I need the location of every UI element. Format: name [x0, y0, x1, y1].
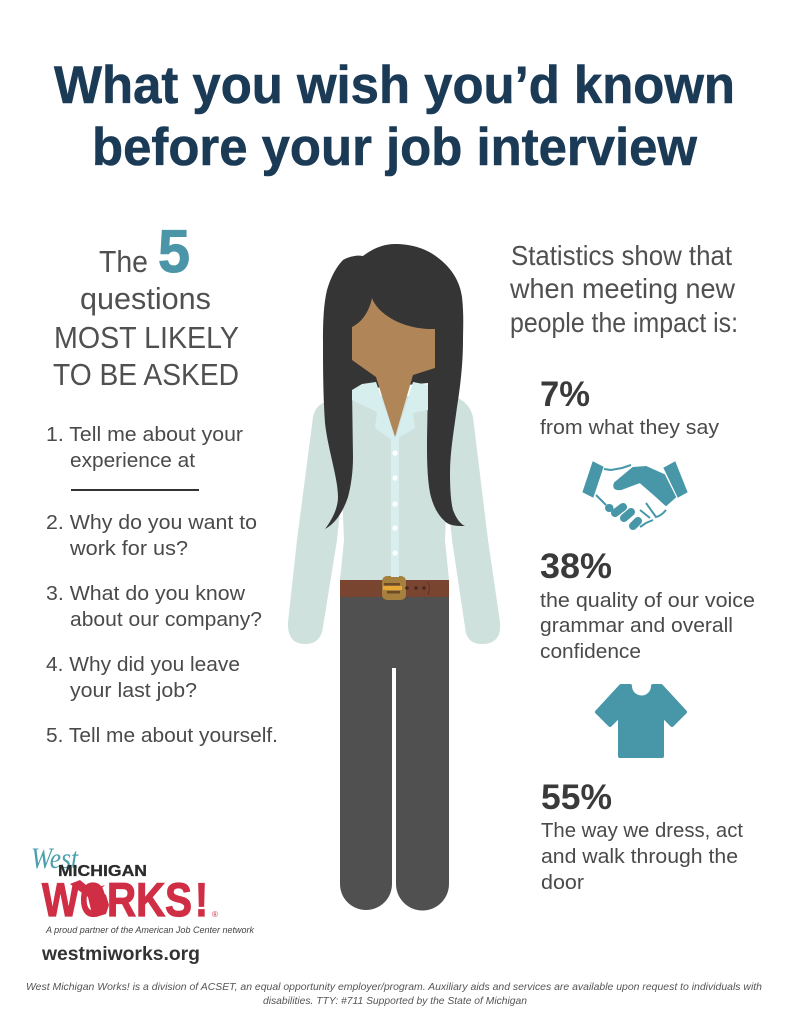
question list: 4. Why did you leave	[46, 654, 240, 676]
question list	[46, 424, 278, 747]
question list: work for us?	[69, 538, 188, 560]
stat: 7%	[540, 375, 719, 439]
logo: West Michigan Works: RKS	[107, 873, 192, 926]
belt	[340, 576, 449, 600]
logo: West Michigan Works	[31, 842, 218, 926]
logo tagline: A proud partner of the American Job Center network	[45, 925, 254, 935]
stat: 7%: 7%	[540, 375, 590, 414]
question list: 1. Tell me about your	[46, 424, 243, 446]
question list: about our company?	[70, 609, 262, 631]
shirt placket and buttons	[391, 437, 399, 577]
question list: 5. Tell me about yourself.	[46, 725, 278, 747]
stat: 38%: the quality of our voice	[540, 590, 755, 612]
question list: your last job?	[70, 680, 197, 702]
heading: the 5 questions: MOST LIKELY	[54, 320, 239, 355]
logo: West Michigan Works: MICHIGAN	[58, 863, 147, 880]
trousers	[340, 595, 449, 910]
collar	[352, 382, 428, 440]
title: What you wish you’d known	[54, 56, 735, 115]
stat: 55%: and walk through the	[541, 846, 738, 868]
stat: 38%	[540, 547, 755, 663]
heading: the 5 questions: questions	[80, 281, 211, 316]
logo: West Michigan Works: ®	[212, 910, 218, 919]
stat: 55%	[541, 778, 743, 894]
logo: West Michigan Works: !	[195, 873, 208, 926]
icon: t-shirt	[597, 686, 685, 756]
hair	[323, 244, 465, 529]
illustration: woman figure	[288, 244, 500, 910]
footer disclaimer	[26, 981, 762, 1007]
title	[54, 56, 735, 177]
stat: 7%: from what they say	[540, 417, 719, 439]
stat: 38%: grammar and overall	[540, 615, 733, 637]
footer disclaimer: disabilities. TTY: #711 Supported by the State of Michigan	[263, 995, 527, 1007]
sleeves and torso	[288, 396, 500, 644]
icon: handshake	[583, 462, 687, 527]
statistics intro: Statistics show that	[511, 240, 732, 271]
stat: 55%: door	[541, 872, 584, 894]
statistics intro: people the impact is:	[510, 307, 738, 338]
stat: 38%: confidence	[540, 641, 641, 663]
logo: West Michigan Works: West	[31, 842, 79, 875]
stat: 55%: The way we dress, act	[541, 820, 743, 842]
stat: 38%: 38%	[540, 547, 612, 586]
question list: 3. What do you know	[46, 583, 246, 605]
logo: West Michigan Works: O	[80, 873, 106, 926]
title: before your job interview	[92, 118, 698, 177]
footer disclaimer: West Michigan Works! is a division of ACSET, an equal opportunity employer/program. Auxiliary aids and services are available upon request to individuals with	[26, 981, 762, 993]
website: westmiworks.org	[41, 944, 200, 965]
question list: 2. Why do you want to	[46, 512, 257, 534]
statistics intro	[509, 240, 738, 338]
stat: 55%: 55%	[541, 778, 612, 817]
statistics intro: when meeting new	[509, 273, 736, 304]
heading: the 5 questions: 5	[158, 218, 190, 285]
heading: the 5 questions	[53, 218, 239, 392]
face and neck	[352, 298, 435, 437]
heading: the 5 questions: The	[99, 244, 148, 279]
heading: the 5 questions: TO BE ASKED	[53, 357, 239, 392]
question list: experience at	[70, 450, 195, 472]
logo: West Michigan Works: W	[42, 873, 80, 926]
